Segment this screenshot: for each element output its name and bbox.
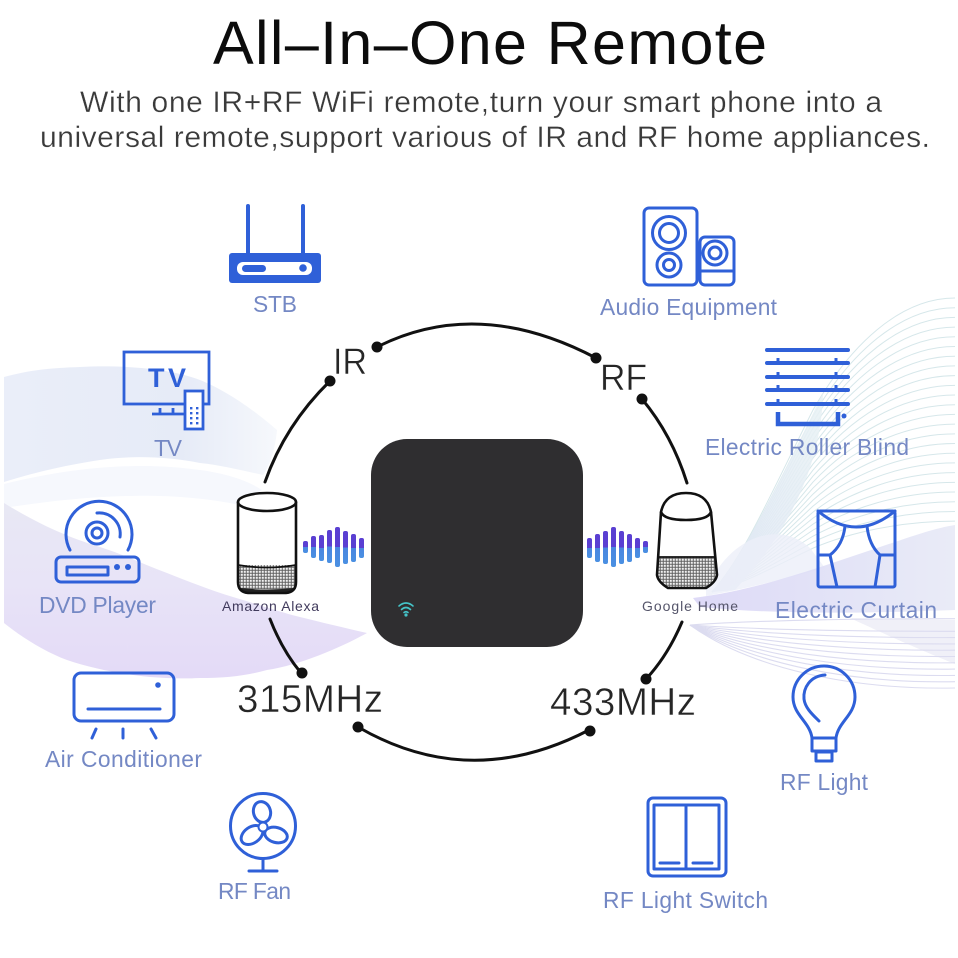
icon: air conditioner <box>74 673 174 738</box>
label: RF: RF <box>600 357 647 398</box>
label: Amazon Alexa: Amazon Alexa <box>222 598 319 614</box>
item: Electric Curtain <box>775 511 937 623</box>
background wave: right grey wedge <box>850 618 955 664</box>
item: STB <box>229 206 321 317</box>
circuit ring arcs with dots <box>265 324 687 760</box>
background wave: right teal lines <box>712 298 955 592</box>
amazon alexa speaker <box>222 493 319 614</box>
background wave: right lavender lines <box>690 619 955 688</box>
label: 433MHz: 433MHz <box>550 681 696 724</box>
icon: speakers <box>644 208 734 285</box>
icon: curtain <box>818 511 895 587</box>
icon: light bulb <box>793 666 855 761</box>
item: Air Conditioner <box>45 673 202 772</box>
item: RF Light <box>780 666 869 795</box>
sound wave left <box>303 527 364 567</box>
google home speaker <box>642 493 738 614</box>
label: Air Conditioner: Air Conditioner <box>45 746 202 772</box>
label: Audio Equipment: Audio Equipment <box>600 294 778 320</box>
central device: remote hub <box>371 439 583 647</box>
background wave: left blue band <box>4 366 277 482</box>
icon: light switch <box>648 798 726 876</box>
item: Audio Equipment <box>600 208 778 320</box>
label: 315MHz: 315MHz <box>237 678 383 721</box>
item: DVD Player <box>39 501 156 618</box>
icon: fan <box>230 794 296 871</box>
label: Electric Curtain: Electric Curtain <box>775 597 937 623</box>
icon: DVD player <box>56 501 139 582</box>
item: RF Fan <box>218 794 296 904</box>
label: TV: TV <box>154 435 183 461</box>
sound wave right <box>587 527 648 567</box>
icon: set-top box <box>229 206 321 283</box>
label: Electric Roller Blind: Electric Roller Blind <box>705 434 909 460</box>
title: All–In–One Remote <box>213 9 767 77</box>
label: Google Home: Google Home <box>642 598 738 614</box>
icon: TV with remote: TV <box>148 363 186 393</box>
icon: roller blind <box>767 350 848 424</box>
item: Electric Roller Blind <box>705 350 909 460</box>
label: IR: IR <box>333 341 367 382</box>
background wave: right lavender wedge <box>693 525 955 613</box>
label: STB: STB <box>253 291 297 317</box>
subtitle: universal remote,support various of IR and RF home appliances. <box>40 121 930 154</box>
background wave: right pale hump <box>706 534 825 596</box>
icon: wifi <box>399 603 413 616</box>
background wave: right pale wedge <box>712 393 823 592</box>
item: RF Light Switch <box>603 798 768 913</box>
background wave: left purple band <box>4 503 367 678</box>
label: RF Light Switch: RF Light Switch <box>603 887 768 913</box>
subtitle: With one IR+RF WiFi remote,turn your smart phone into a <box>80 86 882 119</box>
item: TV <box>124 352 209 461</box>
label: RF Fan: RF Fan <box>218 878 291 904</box>
background wave: left pale band <box>4 466 262 507</box>
label: DVD Player: DVD Player <box>39 592 156 618</box>
subtitle <box>40 86 930 154</box>
label: RF Light: RF Light <box>780 769 869 795</box>
